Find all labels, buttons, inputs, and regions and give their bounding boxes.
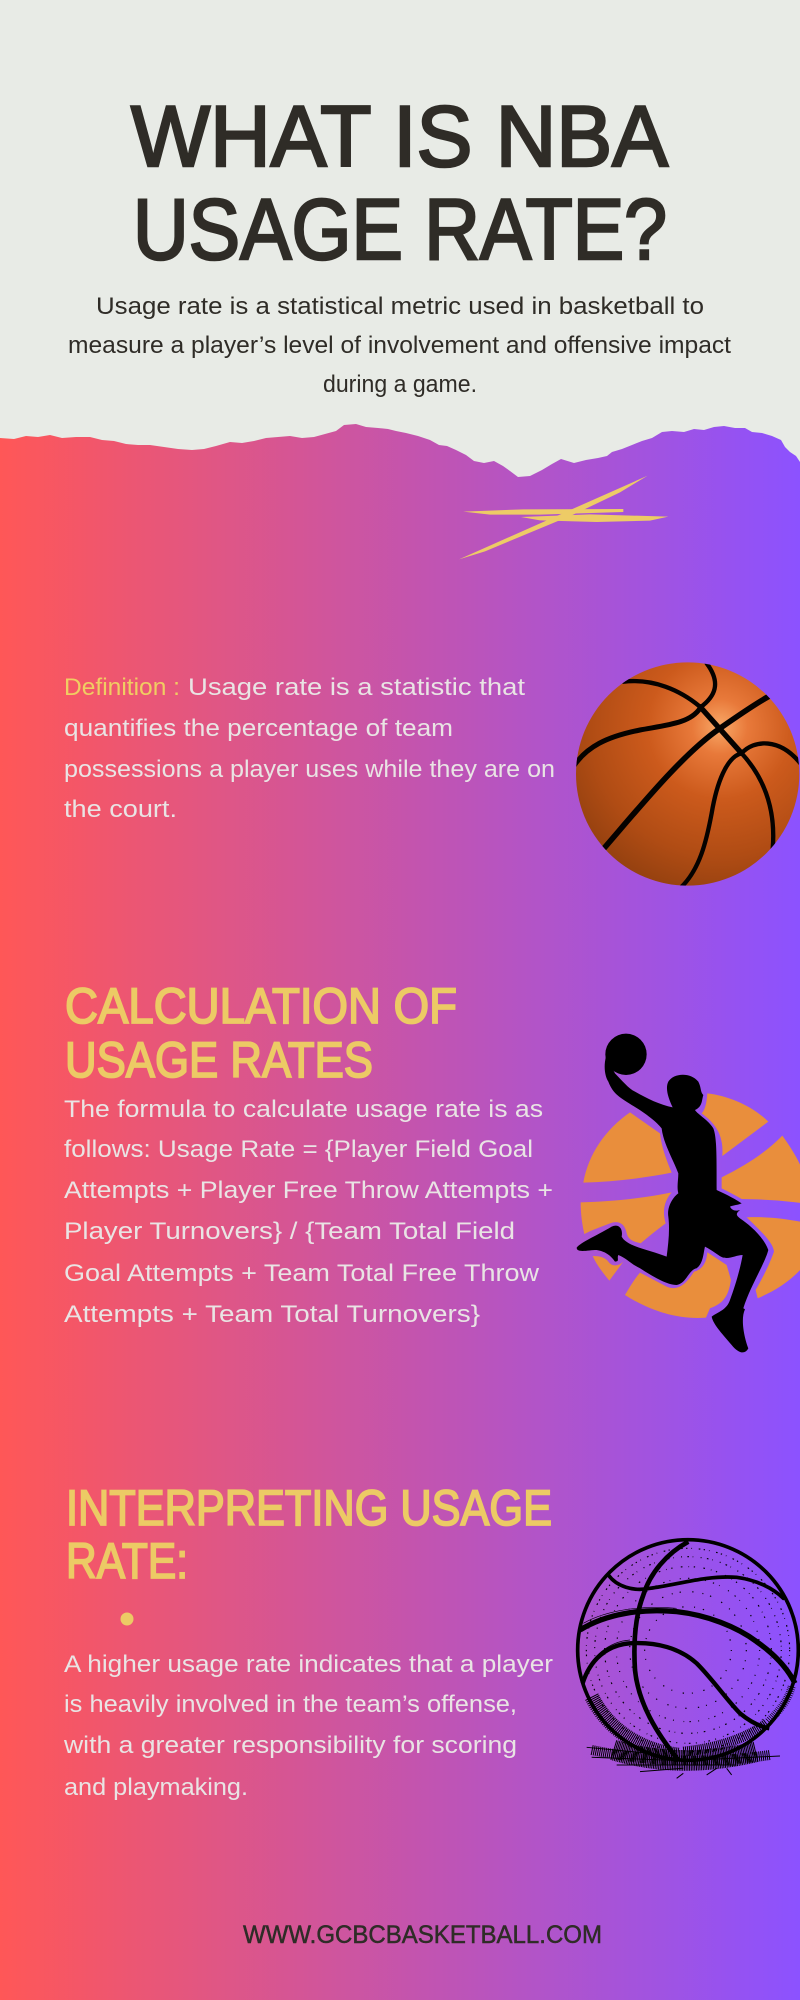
heading: calculation: USAGE RATES — [65, 1032, 373, 1088]
icon: orange basketball — [573, 662, 800, 888]
bullet — [120, 1612, 134, 1626]
interpreting text: is heavily involved in the team’s offense, — [64, 1691, 517, 1718]
interpreting text: and playmaking. — [64, 1774, 248, 1801]
ball outline — [578, 1540, 798, 1760]
calculation text: Player Turnovers} / {Team Total Field — [64, 1218, 515, 1245]
heading: interpreting — [66, 1480, 552, 1589]
torn paper header — [0, 0, 800, 477]
calculation text: Attempts + Team Total Turnovers} — [64, 1301, 480, 1328]
title: USAGE RATE? — [133, 182, 667, 278]
calculation text: The formula to calculate usage rate is as — [64, 1096, 543, 1123]
footer url: WWW.GCBCBASKETBALL.COM — [243, 1921, 602, 1949]
definition text: possessions a player uses while they are on — [64, 756, 555, 783]
calculation text — [64, 1096, 553, 1328]
title: WHAT IS NBA — [131, 89, 669, 185]
heading: interpreting: RATE: — [66, 1533, 188, 1589]
ground shadow — [587, 1747, 780, 1778]
scribble accent — [459, 476, 668, 559]
intro text — [68, 293, 731, 398]
intro text: Usage rate is a statistical metric used in basketball to — [96, 293, 704, 320]
calculation text: Attempts + Player Free Throw Attempts + — [64, 1177, 553, 1204]
speckle shading — [586, 1548, 790, 1752]
hatch shading — [592, 1697, 678, 1755]
intro text: during a game. — [323, 371, 477, 398]
interpreting text — [63, 1651, 553, 1801]
definition text: Definition : — [64, 674, 180, 701]
definition text: quantifies the percentage of team — [64, 715, 453, 742]
icon: sketched basketball — [578, 1540, 798, 1778]
orange ball wedges — [581, 1093, 800, 1318]
heading: calculation — [65, 978, 457, 1088]
heading: calculation: CALCULATION OF — [65, 978, 457, 1034]
seams — [608, 1575, 783, 1598]
title — [131, 89, 669, 278]
definition text: Usage rate is a statistic that — [188, 674, 525, 701]
interpreting text: with a greater responsibility for scoring — [63, 1732, 517, 1759]
definition text — [64, 674, 555, 823]
intro text: measure a player’s level of involvement and offensive impact — [68, 332, 731, 359]
player silhouette — [577, 1034, 768, 1352]
calculation text: follows: Usage Rate = {Player Field Goal — [64, 1136, 533, 1163]
definition text: the court. — [64, 796, 177, 823]
interpreting text: A higher usage rate indicates that a player — [64, 1651, 553, 1678]
heading: interpreting: INTERPRETING USAGE — [66, 1480, 552, 1536]
icon: slam dunk player over basketball — [577, 1034, 800, 1352]
calculation text: Goal Attempts + Team Total Free Throw — [64, 1260, 540, 1287]
